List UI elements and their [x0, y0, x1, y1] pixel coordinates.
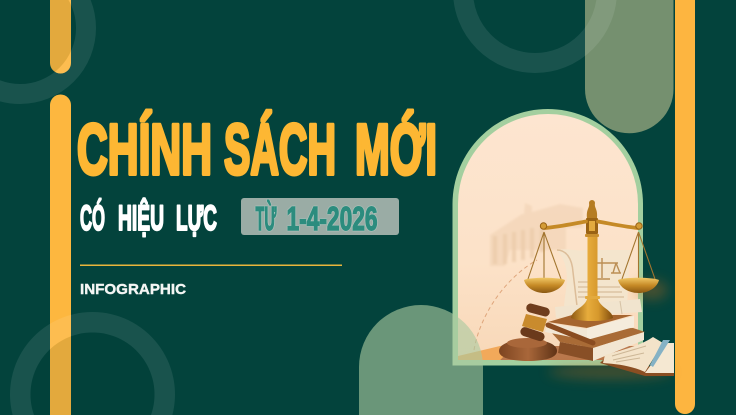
lower book [550, 328, 645, 361]
open book [600, 337, 674, 376]
floor [500, 346, 645, 360]
right pan [618, 232, 659, 293]
divider line [80, 264, 342, 266]
right bar [675, 0, 695, 414]
date badge [241, 198, 399, 238]
date badge: 1-4-2026 [286, 201, 378, 238]
illustration background: building and paths [458, 203, 645, 360]
left pan [524, 232, 565, 293]
subtitle: HIỆU [118, 198, 164, 238]
subtitle: CÓ [80, 198, 105, 238]
illustration: scale, books, gavel [499, 200, 674, 379]
ring: top right [463, 0, 607, 63]
title [77, 109, 437, 190]
ring: bottom left [10, 312, 175, 415]
gavel base [499, 338, 557, 361]
left long bar [50, 94, 71, 415]
date badge: TỪ [256, 200, 277, 238]
label: infographic: INFOGRAPHIC [80, 281, 186, 298]
title: CHÍNH [77, 110, 212, 190]
title: MỚI [355, 109, 437, 190]
scale beam [540, 222, 642, 229]
pill: bottom centre [359, 305, 483, 415]
ring: top left [0, 0, 86, 94]
pill: top right [585, 0, 674, 133]
dashed curve [474, 260, 537, 350]
title: SÁCH [224, 110, 336, 190]
icon: faded courthouse [490, 203, 583, 266]
glow [548, 280, 672, 379]
arch frame [452, 109, 643, 366]
gavel [519, 303, 593, 343]
upper book [545, 315, 634, 340]
scroll document [555, 249, 642, 318]
subtitle [80, 198, 217, 238]
left top bar [50, 0, 71, 74]
scale stand [571, 200, 613, 321]
subtitle: LỰC [176, 199, 217, 238]
